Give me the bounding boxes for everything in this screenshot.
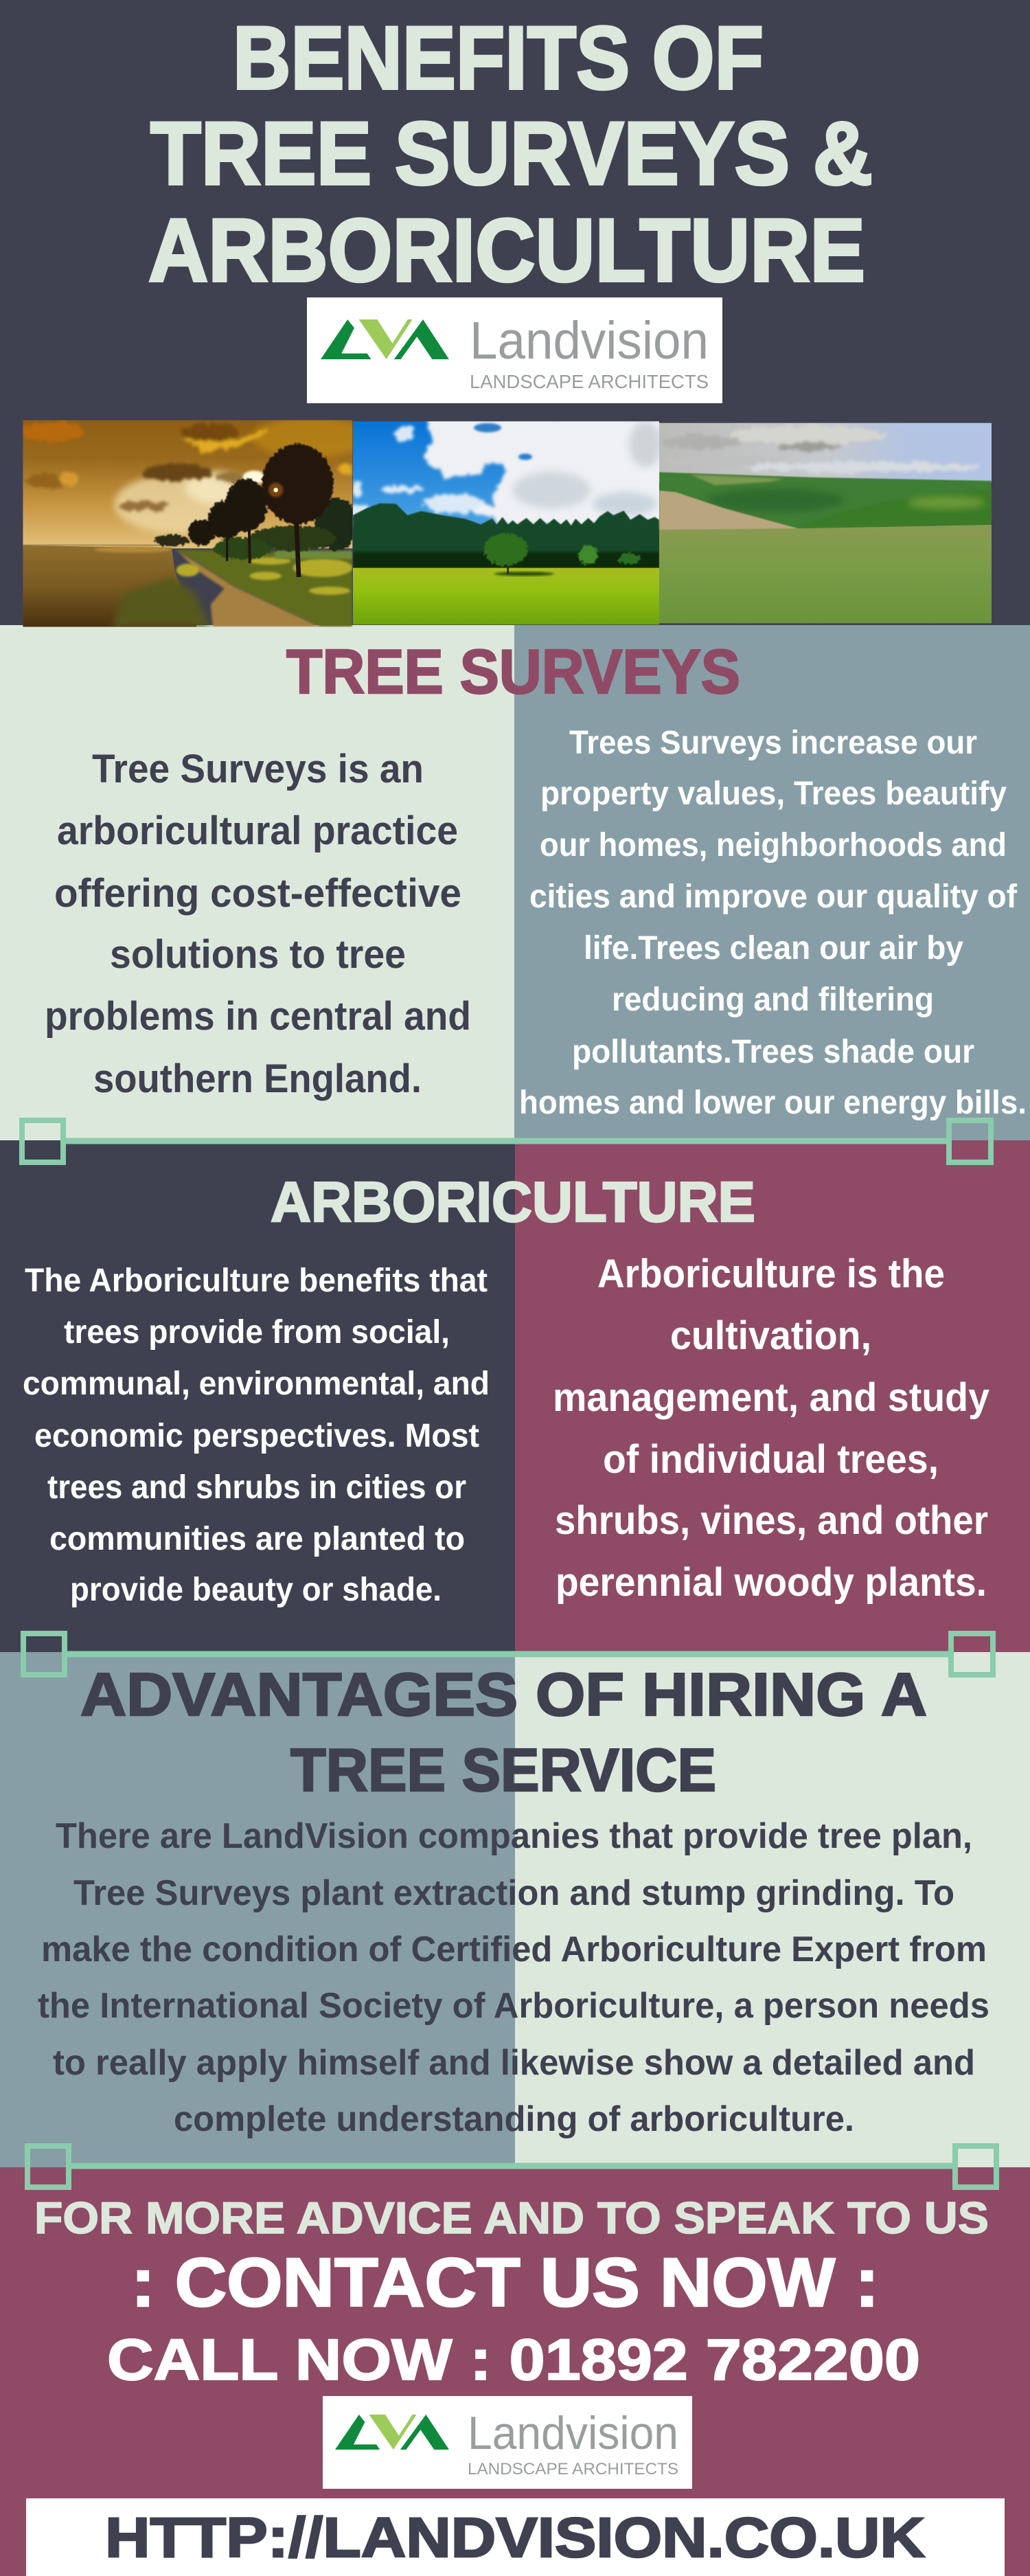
panel: advantages background xyxy=(0,1652,1030,2167)
panel: arboriculture background xyxy=(0,1140,1030,1652)
text block: tree surveys definition: solutions to tree xyxy=(110,932,406,977)
text block: arboriculture benefits: trees provide from social, xyxy=(64,1314,450,1351)
text block: arboriculture benefits: communities are planted to xyxy=(49,1521,465,1557)
text block: tree survey benefits: Trees Surveys increase our xyxy=(569,725,977,761)
text block: arboriculture definition: Arboriculture is the xyxy=(597,1252,945,1296)
text block: advantages: the International Society of Arboriculture, a person needs xyxy=(38,1986,989,2026)
text block: arboriculture benefits: The Arboriculture benefits that xyxy=(25,1263,488,1299)
photo: sunset over a field xyxy=(21,417,371,627)
text block: tree surveys definition: southern England. xyxy=(93,1057,422,1101)
logo: Landvision footer: Landvision xyxy=(468,2407,678,2459)
title: TREE SURVEYS & xyxy=(150,103,873,203)
text: phone number: CALL NOW : 01892 782200 xyxy=(107,2327,920,2392)
text block: tree surveys definition: Tree Surveys is an xyxy=(92,747,424,791)
text block: tree survey benefits xyxy=(519,725,1027,1121)
text block: advantages: There are LandVision companies that provide tree plan, xyxy=(56,1816,972,1856)
text block: arboriculture benefits: communal, environmental, and xyxy=(23,1366,490,1402)
text block: arboriculture benefits: economic perspectives. Most xyxy=(34,1418,479,1454)
logo: Landvision header xyxy=(307,297,722,403)
heading: advantages of hiring a tree service: ADVANTAGES OF HIRING A xyxy=(80,1660,927,1728)
panel: tree surveys background xyxy=(0,625,1030,1140)
text block: advantages: Tree Surveys plant extraction and stump grinding. To xyxy=(73,1873,954,1913)
text: contact us now: : CONTACT US NOW : xyxy=(131,2244,879,2321)
text block: advantages xyxy=(38,1816,989,2139)
text block: tree surveys definition: problems in central and xyxy=(45,994,471,1039)
title: ARBORICULTURE xyxy=(148,200,865,300)
text block: tree survey benefits: reducing and filtering xyxy=(612,982,934,1018)
text block: arboriculture definition: of individual trees, xyxy=(603,1437,939,1482)
panel: header background xyxy=(0,0,1030,626)
logo: Landvision header: Landvision xyxy=(470,311,709,370)
website bar xyxy=(26,2498,1005,2576)
website bar: HTTP://LANDVISION.CO.UK xyxy=(105,2507,925,2569)
text block: arboriculture definition xyxy=(553,1252,989,1605)
text block: tree surveys definition xyxy=(45,747,471,1101)
heading: advantages of hiring a tree service: TREE SERVICE xyxy=(290,1736,716,1804)
text block: arboriculture benefits: trees and shrubs in cities or xyxy=(47,1469,466,1506)
heading: arboriculture: ARBORICULTURE xyxy=(271,1170,755,1234)
text block: tree surveys definition: offering cost-effective xyxy=(54,871,461,916)
text block: advantages: make the condition of Certified Arboriculture Expert from xyxy=(41,1930,987,1969)
heading: tree surveys: TREE SURVEYS xyxy=(286,637,740,707)
text block: arboriculture definition: cultivation, xyxy=(670,1313,871,1358)
text block: arboriculture benefits xyxy=(23,1263,490,1608)
text block: arboriculture definition: management, and study xyxy=(553,1375,989,1420)
text block: advantages: complete understanding of arboriculture. xyxy=(174,2099,854,2139)
logo: Landvision footer xyxy=(323,2396,692,2489)
heading: advantages of hiring a tree service xyxy=(80,1660,927,1804)
text: contact invitation: FOR MORE ADVICE AND TO SPEAK TO US xyxy=(34,2193,989,2243)
panel: contact background xyxy=(0,2167,1030,2576)
logo: Landvision footer: LANDSCAPE ARCHITECTS xyxy=(468,2460,678,2478)
text block: arboriculture benefits: provide beauty or shade. xyxy=(70,1572,442,1608)
text block: tree survey benefits: pollutants.Trees shade our xyxy=(572,1034,974,1070)
photo: rolling green hills xyxy=(659,423,992,623)
divider frame: tree surveys to arboriculture xyxy=(22,1120,991,1162)
text block: tree surveys definition: arboricultural practice xyxy=(57,809,458,853)
photo: meadow with blue sky xyxy=(347,417,666,624)
text block: arboriculture definition: shrubs, vines, and other xyxy=(555,1498,988,1543)
text block: tree survey benefits: life.Trees clean our air by xyxy=(584,930,963,967)
text block: tree survey benefits: our homes, neighborhoods and xyxy=(540,827,1007,863)
title: BENEFITS OF xyxy=(233,8,764,108)
divider frame: advantages to contact xyxy=(27,2146,996,2187)
text block: tree survey benefits: property values, Trees beautify xyxy=(540,776,1007,812)
logo: Landvision header: LANDSCAPE ARCHITECTS xyxy=(470,371,709,392)
text block: advantages: to really apply himself and likewise show a detailed and xyxy=(53,2043,975,2083)
title xyxy=(148,8,873,300)
text block: arboriculture definition: perennial woody plants. xyxy=(556,1560,987,1605)
divider frame: arboriculture to advantages xyxy=(23,1634,993,1675)
text block: tree survey benefits: cities and improve our quality of xyxy=(529,879,1018,915)
